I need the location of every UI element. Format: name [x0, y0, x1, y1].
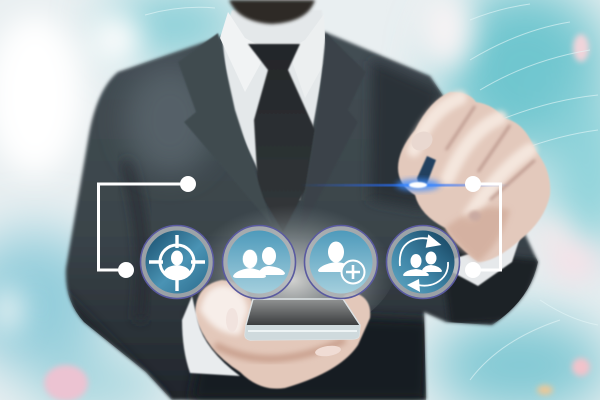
beard	[229, 0, 315, 24]
jacket lapels	[178, 33, 366, 238]
pen	[417, 156, 436, 186]
suit jacket	[60, 32, 540, 400]
finger highlights	[414, 98, 530, 215]
necktie	[248, 44, 315, 232]
suit shading and folds	[60, 60, 540, 400]
radial streaks	[145, 4, 598, 380]
icon: target person	[140, 226, 214, 298]
left bracket connector	[98, 176, 196, 278]
shirt collar and front	[220, 10, 326, 200]
left hand holding phone	[195, 280, 370, 389]
right hand holding pen	[398, 92, 550, 262]
right bracket connector	[465, 176, 500, 278]
icon: refresh people	[386, 226, 460, 298]
icon: add person	[304, 226, 378, 298]
left shirt cuff	[182, 296, 240, 376]
icon: two people	[222, 226, 296, 298]
central glow behind icons	[187, 187, 397, 337]
smartphone	[245, 299, 360, 340]
laser beam from pen	[300, 179, 510, 191]
right shirt cuff	[448, 238, 520, 286]
